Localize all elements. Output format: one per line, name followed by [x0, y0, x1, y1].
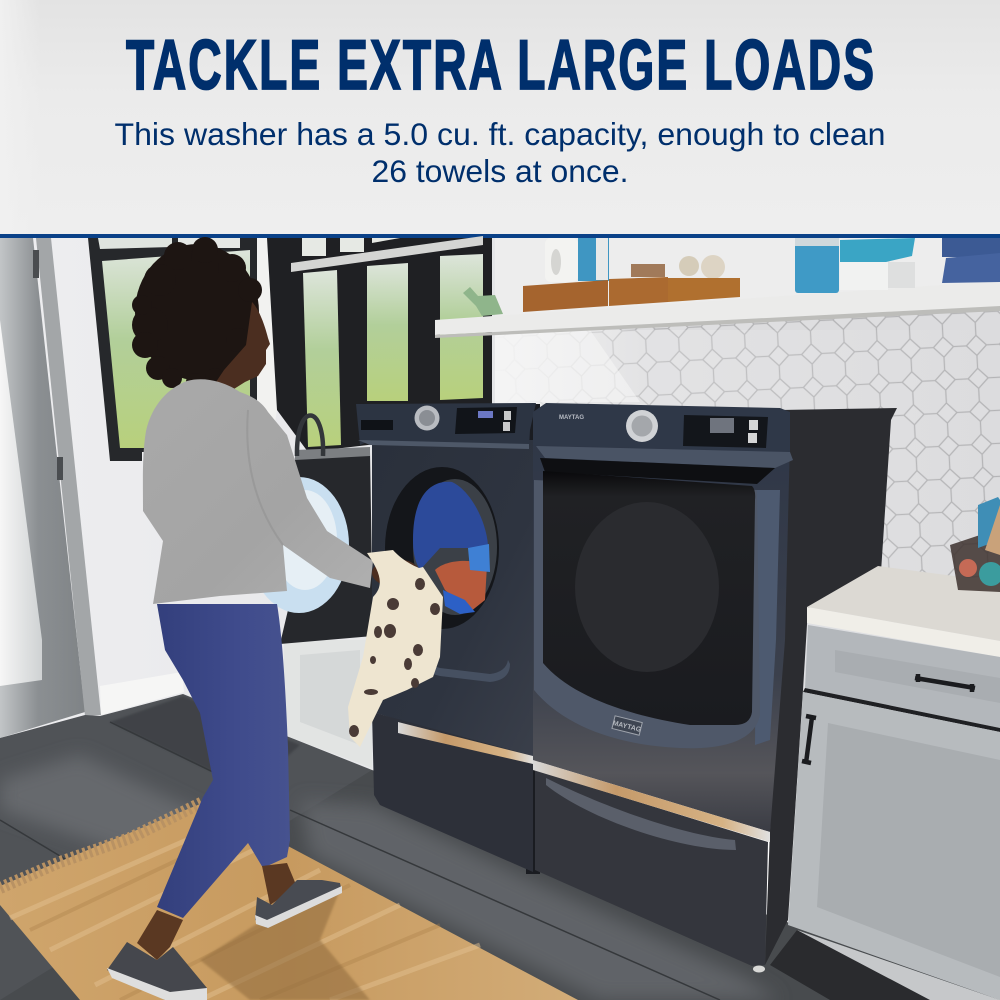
- dryer door trim: [534, 480, 760, 748]
- photo: laundry room: [0, 236, 1000, 1000]
- front shoe: [255, 880, 342, 928]
- brand badge: MAYTAG: [612, 720, 642, 734]
- washer door lower bulge: [372, 648, 510, 682]
- brand badge: [611, 716, 643, 735]
- washer drum opening: [385, 467, 499, 629]
- brand text on console: MAYTAG: [559, 415, 584, 421]
- paw prints: [349, 578, 440, 737]
- shelf items: [463, 238, 1000, 316]
- back wall: [0, 238, 1000, 778]
- rear shoe: [107, 942, 207, 1000]
- left window: [88, 238, 277, 461]
- hair: [132, 237, 262, 391]
- rear ankle: [137, 910, 183, 960]
- person: [107, 237, 420, 1000]
- patio door: [0, 238, 184, 738]
- washer: [356, 403, 536, 872]
- sweater: [143, 379, 373, 604]
- header panel: [0, 0, 1000, 235]
- subtitle: This washer has a 5.0 cu. ft. capacity, enough to clean: [114, 116, 886, 152]
- drawer handle: [915, 674, 975, 692]
- washer console: [356, 403, 536, 449]
- pants: [157, 604, 290, 918]
- dryer side panel: [765, 408, 897, 965]
- front ankle: [262, 863, 297, 905]
- hand: [372, 559, 420, 587]
- tile backsplash: [495, 308, 1000, 600]
- subtitle: 26 towels at once.: [372, 153, 628, 189]
- dryer drum shadow: [575, 502, 719, 672]
- foot: [753, 966, 765, 972]
- subtitle: [114, 116, 886, 189]
- washer pedestal: [372, 712, 533, 872]
- right window: [267, 236, 492, 452]
- rug: [0, 802, 578, 1000]
- dryer glass door: [543, 471, 755, 725]
- title: TACKLE EXTRA LARGE LOADS: [126, 25, 874, 104]
- face: [212, 302, 270, 394]
- wire basket: [950, 497, 1000, 592]
- dryer pedestal: [535, 770, 768, 966]
- header divider line: [0, 234, 1000, 238]
- dryer right column highlight: [755, 490, 780, 745]
- white cabinet behind washer: [284, 640, 372, 768]
- arm seam: [247, 410, 283, 545]
- door handle: [802, 716, 816, 763]
- towel: [348, 550, 443, 747]
- counter and cabinets: [788, 566, 1000, 1000]
- floor: [0, 694, 760, 1000]
- dryer console: [533, 403, 793, 484]
- dryer: [533, 403, 793, 972]
- shelf: [435, 281, 1000, 338]
- floor tile joints: [0, 722, 720, 1000]
- pedestal handle: [546, 778, 736, 850]
- washer door open: [249, 416, 373, 644]
- seam between appliances: [526, 404, 540, 874]
